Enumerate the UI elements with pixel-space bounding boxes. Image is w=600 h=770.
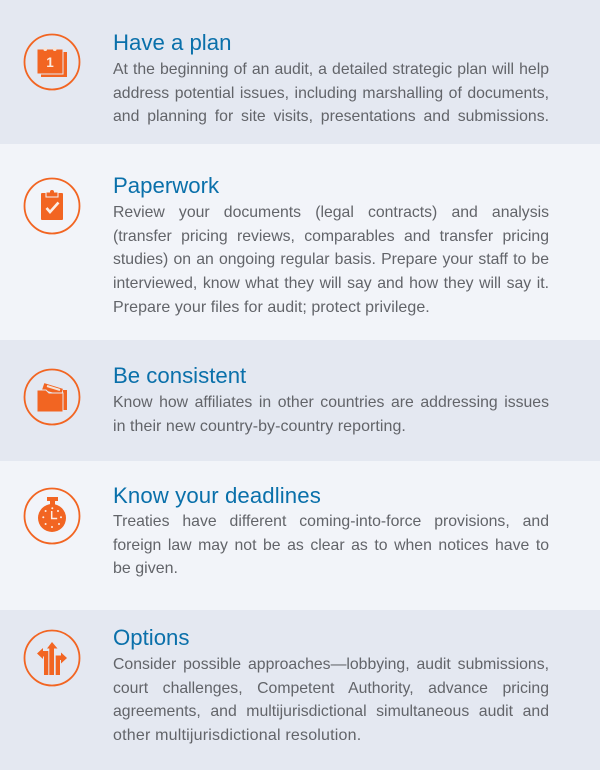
- text block: other multijurisdictional resolution.: [113, 727, 361, 744]
- text block: Review your documents (legal contracts) and analysis: [113, 204, 549, 221]
- text block: [113, 513, 549, 577]
- panel: options: [0, 610, 600, 770]
- heading: Know your deadlines: [113, 483, 321, 508]
- text block: (transfer pricing reviews, comparables and transfer pricing: [113, 228, 549, 245]
- heading: Options: [113, 625, 189, 650]
- panel: have a plan: [0, 0, 600, 144]
- text block: [113, 61, 549, 125]
- text block: [113, 656, 549, 744]
- text block: [113, 394, 549, 435]
- text block: in their new country-by-country reporting.: [113, 418, 406, 435]
- icon: calendar: [24, 34, 80, 90]
- text block: interviewed, know what they will say and how they will say it.: [113, 275, 549, 292]
- heading: Paperwork: [113, 173, 219, 198]
- text block: Prepare your files for audit; protect privilege.: [113, 299, 430, 316]
- text block: Consider possible approaches—lobbying, audit submissions,: [113, 656, 549, 673]
- icon: folder: [24, 368, 80, 426]
- text block: and planning for site visits, presentations and submissions.: [113, 108, 549, 125]
- text block: [113, 204, 549, 316]
- icon: stopwatch: [24, 488, 80, 544]
- panel: be consistent: [0, 340, 600, 461]
- icon: arrows: [24, 630, 80, 686]
- heading: Have a plan: [113, 30, 231, 55]
- text block: At the beginning of an audit, a detailed strategic plan will help: [113, 61, 549, 78]
- icon: clipboard: [24, 178, 80, 234]
- text block: studies) on an ongoing regular basis. Prepare your staff to be: [113, 251, 549, 268]
- text block: be given.: [113, 560, 178, 577]
- heading: Be consistent: [113, 363, 246, 388]
- text block: Treaties have different coming-into-force provisions, and: [113, 513, 549, 530]
- text block: agreements, and multijurisdictional simultaneous audit and: [113, 703, 549, 720]
- text block: Know how affiliates in other countries are addressing issues: [113, 394, 549, 411]
- panel: paperwork: [0, 144, 600, 340]
- text block: court challenges, Competent Authority, advance pricing: [113, 680, 549, 697]
- text block: foreign law may not be as clear as to when notices have to: [113, 537, 549, 554]
- panel: know your deadlines: [0, 461, 600, 610]
- text block: address potential issues, including marshalling of documents,: [113, 85, 549, 102]
- icon: calendar: 1: [46, 55, 54, 70]
